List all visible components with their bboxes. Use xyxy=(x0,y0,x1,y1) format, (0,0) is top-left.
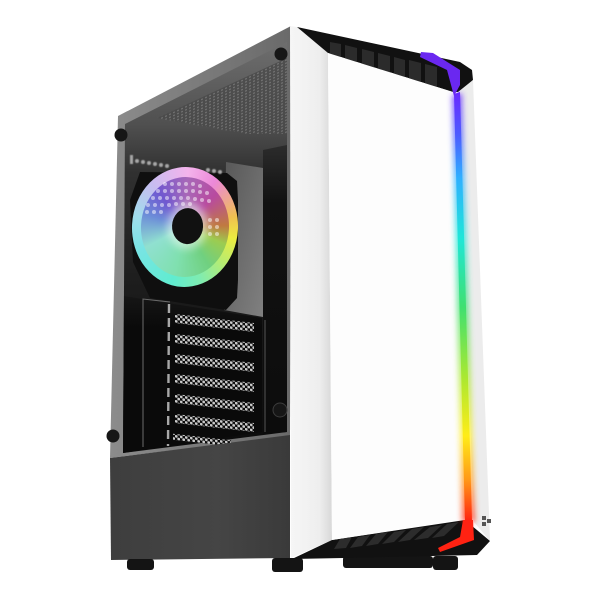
fan blades xyxy=(138,175,232,279)
glass side panel xyxy=(110,26,291,458)
bottom vent xyxy=(292,520,490,559)
white front left chamfer xyxy=(290,26,332,558)
drive bracket xyxy=(143,299,170,447)
logo xyxy=(482,516,491,526)
purple corner light xyxy=(420,52,460,96)
right slot bracket xyxy=(264,320,266,432)
red corner light xyxy=(438,520,474,552)
white front panel xyxy=(328,53,461,540)
screws xyxy=(106,48,288,442)
lower expansion bay xyxy=(123,296,262,453)
lower black shroud xyxy=(110,435,290,560)
right inner column xyxy=(263,145,287,434)
top vent xyxy=(297,27,473,92)
RGB light strip xyxy=(420,52,475,552)
top mesh xyxy=(157,58,287,134)
fan ring xyxy=(129,164,241,290)
fan hub xyxy=(171,207,204,245)
drive plate xyxy=(224,162,263,317)
white right strip xyxy=(458,80,490,541)
fan bracket xyxy=(130,172,238,310)
dashed slot line xyxy=(168,304,169,446)
dotted fan holes xyxy=(130,155,222,174)
perforated slots xyxy=(173,314,254,449)
feet xyxy=(127,556,458,572)
